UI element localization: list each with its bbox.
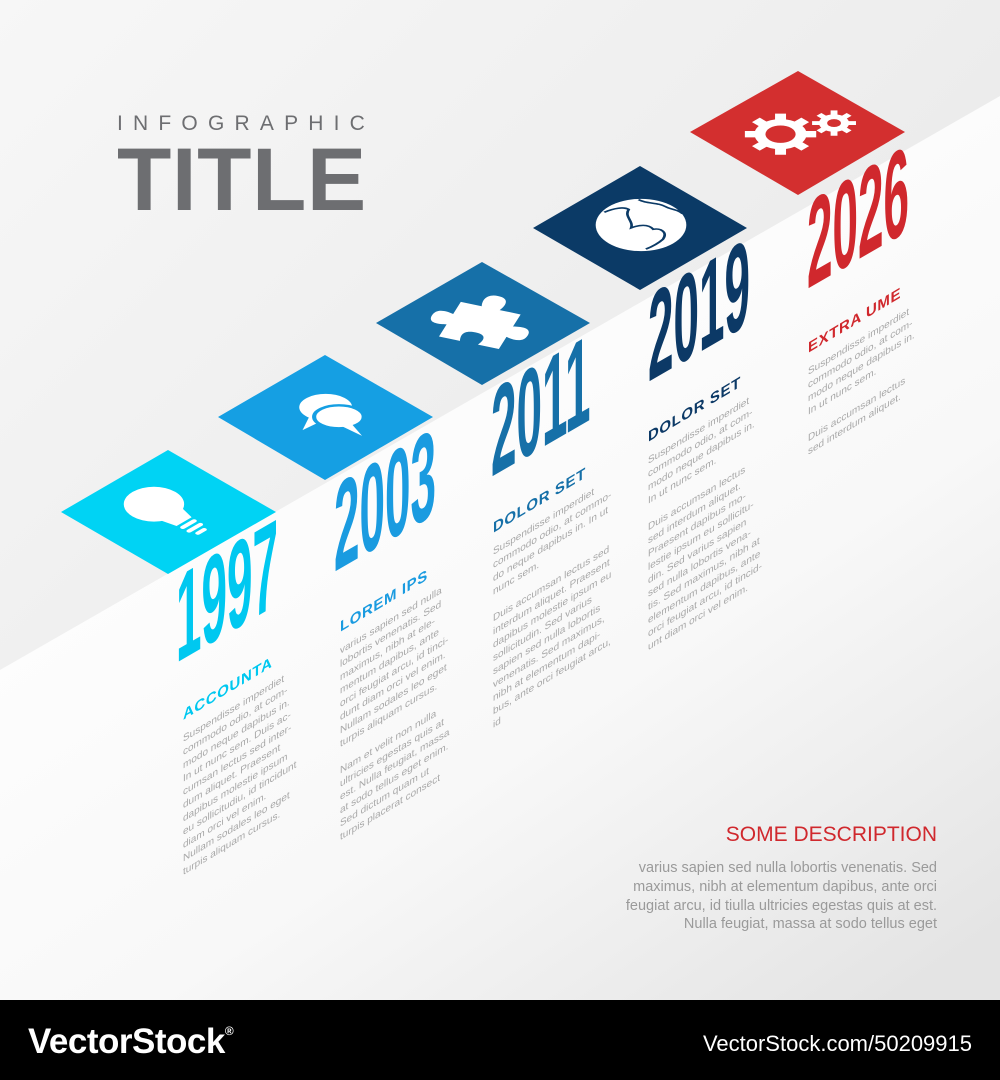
column 1 text: dapibus molestie ipsum — [183, 751, 287, 825]
year 2011: 2011 — [491, 309, 591, 504]
column 2 text: Nullam sodales leo eget — [340, 661, 447, 737]
column 3 text: Suspendisse imperdiet — [493, 486, 594, 558]
column 2 text: varius sapien sed nulla — [340, 584, 443, 657]
column 2 text: LOREM IPS — [340, 566, 428, 636]
column 3 text: DOLOR SET — [493, 464, 586, 537]
column 2 text: mentum dapibus, ante — [340, 626, 439, 697]
column 1 text: dum aliquet. Praesent — [183, 742, 280, 811]
title: TITLE — [117, 129, 367, 229]
column 4 text: tis. Sed maximus, nibh at — [648, 535, 760, 613]
tile 2011: puzzle — [376, 262, 590, 385]
column 2 text: Sed dictum quam ut — [340, 765, 429, 830]
column 2 text — [340, 553, 450, 843]
footer bar — [0, 1000, 1000, 1080]
column 2 text: orci feugiat arcu, id tinci- — [340, 634, 449, 710]
column 1 text: modo neque dapibus in. — [183, 696, 290, 771]
column 4 text: In ut nunc sem. — [648, 455, 716, 507]
column 4 text: lestie ipsum eu sollicitu- — [648, 499, 754, 573]
column 3 text: sapien sed nulla lobortis — [493, 602, 601, 677]
column 3 text: commodo odio, at commo- — [493, 489, 612, 571]
column 4 text: Suspendisse imperdiet — [648, 395, 749, 467]
column 1 text: turpis aliquam cursus. — [183, 808, 280, 878]
column 5 text — [808, 276, 915, 458]
column 1 text: Nullam sodales leo eget — [183, 789, 290, 864]
column 2 text: maximus, nibh at ele- — [340, 615, 435, 683]
column 2 text: turpis placerat consect — [340, 772, 440, 843]
column 1 text: eu sollicitudiu, id tincidunt — [183, 759, 296, 838]
column 3 text: Duis accumsan lectus sed — [493, 544, 609, 624]
column 2 text: dunt diam orci vel enim. — [340, 649, 446, 723]
column 4 text: Praesent dapibus mo- — [648, 490, 746, 560]
description block: maximus, nibh at elementum dapibus, ante orci — [633, 879, 937, 895]
column 5 text: sed interdum aliquet. — [808, 391, 901, 458]
footer bar: ® — [225, 1024, 234, 1038]
column 1 text: cumsan lectus sed inter- — [183, 722, 292, 798]
column 4 text: sed nulla lobortis vena- — [648, 527, 751, 600]
column 2 text: turpis aliquam cursus. — [340, 680, 437, 750]
description block: varius sapien sed nulla lobortis venenatis. Sed — [639, 860, 937, 876]
column 4 text: orci feugiat arcu, id tincid- — [648, 560, 762, 640]
column 5 text: commodo odio, at com- — [808, 317, 913, 391]
footer bar: VectorStock — [28, 1022, 225, 1061]
column 4 text: Duis accumsan lectus — [648, 464, 746, 533]
column 3 text: venenatis. Sed maximus, — [493, 613, 605, 691]
icon: globe — [596, 199, 686, 251]
column 2 text: est. Nulla feugiat, massa — [340, 726, 450, 803]
year 2019: 2019 — [648, 213, 750, 409]
column 3 text: dapibus molestie ipsum eu — [493, 569, 611, 651]
column 4 text: commodo odio, at com- — [648, 406, 753, 480]
column 1 text: In ut nunc sem. Duis ac- — [183, 709, 291, 785]
column 1 text: diam orci vel enim. — [183, 790, 266, 851]
column 3 text — [493, 449, 612, 731]
column 4 text: din. Sed varius sapien — [648, 516, 746, 586]
column 4 text: unt diam orci vel enim. — [648, 582, 748, 653]
column 2 text: ultricies egestas quis at — [340, 716, 444, 790]
icon: puzzle piece — [421, 286, 546, 353]
title: INFOGRAPHIC — [117, 112, 375, 135]
column 3 text: sollicitudin. Sed varius — [493, 593, 592, 664]
tile 1997: lightbulb — [61, 450, 276, 574]
column 1 text: ACCOUNTA — [183, 653, 272, 724]
column 2 text: at sodo tellus eget enim. — [340, 740, 448, 816]
column 5 text: EXTRA UME — [808, 284, 901, 357]
tile 2003: speech bubbles — [218, 355, 433, 480]
column 3 text: id — [493, 715, 501, 731]
column 2 text: Nam et velit non nulla — [340, 707, 437, 776]
year 2026: 2026 — [807, 120, 909, 316]
column 4 text: elementum dapibus, ante — [648, 548, 760, 626]
column 4 text: sed interdum aliquet. — [648, 480, 741, 547]
column 5 text: In ut nunc sem. — [808, 366, 876, 418]
column 5 text: modo neque dapibus in. — [808, 329, 915, 404]
column 5 text: Duis accumsan lectus — [808, 375, 906, 444]
column 5 text: Suspendisse imperdiet — [808, 306, 909, 378]
icon: speech bubbles — [299, 394, 364, 436]
footer bar: VectorStock.com/50209915 — [703, 1031, 972, 1056]
column 3 text: nunc sem. — [493, 559, 539, 598]
year 1997: 1997 — [176, 494, 278, 690]
tile 2019: globe — [533, 166, 747, 290]
year 2003: 2003 — [334, 403, 436, 599]
column 3 text: nibh at elementum dapi- — [493, 628, 601, 704]
column 3 text: bus, ante orci feugiat arcu, — [493, 636, 611, 717]
column 3 text: interdum aliquet. Praesent — [493, 556, 610, 638]
column 3 text: do neque dapibus in. In ut — [493, 504, 608, 584]
description block — [626, 823, 937, 932]
icon: lightbulb — [111, 480, 224, 545]
icon: gears — [745, 110, 856, 155]
description block: Nulla feugiat, massa at sodo tellus eget — [684, 916, 937, 932]
column 1 text: Suspendisse imperdiet — [183, 673, 284, 745]
column 4 text: DOLOR SET — [648, 373, 741, 446]
description block: feugiat arcu, id tiulla ultricies egestas quis at est. — [626, 898, 937, 914]
column 2 text: lobortis venenatis. Sed — [340, 598, 441, 670]
column 4 text: modo neque dapibus in. — [648, 418, 755, 493]
column 1 text — [183, 639, 296, 878]
tile 2026: gears — [690, 71, 905, 195]
description block: SOME DESCRIPTION — [726, 823, 937, 846]
column 4 text — [648, 361, 762, 653]
column 1 text: commodo odio, at com- — [183, 684, 288, 758]
